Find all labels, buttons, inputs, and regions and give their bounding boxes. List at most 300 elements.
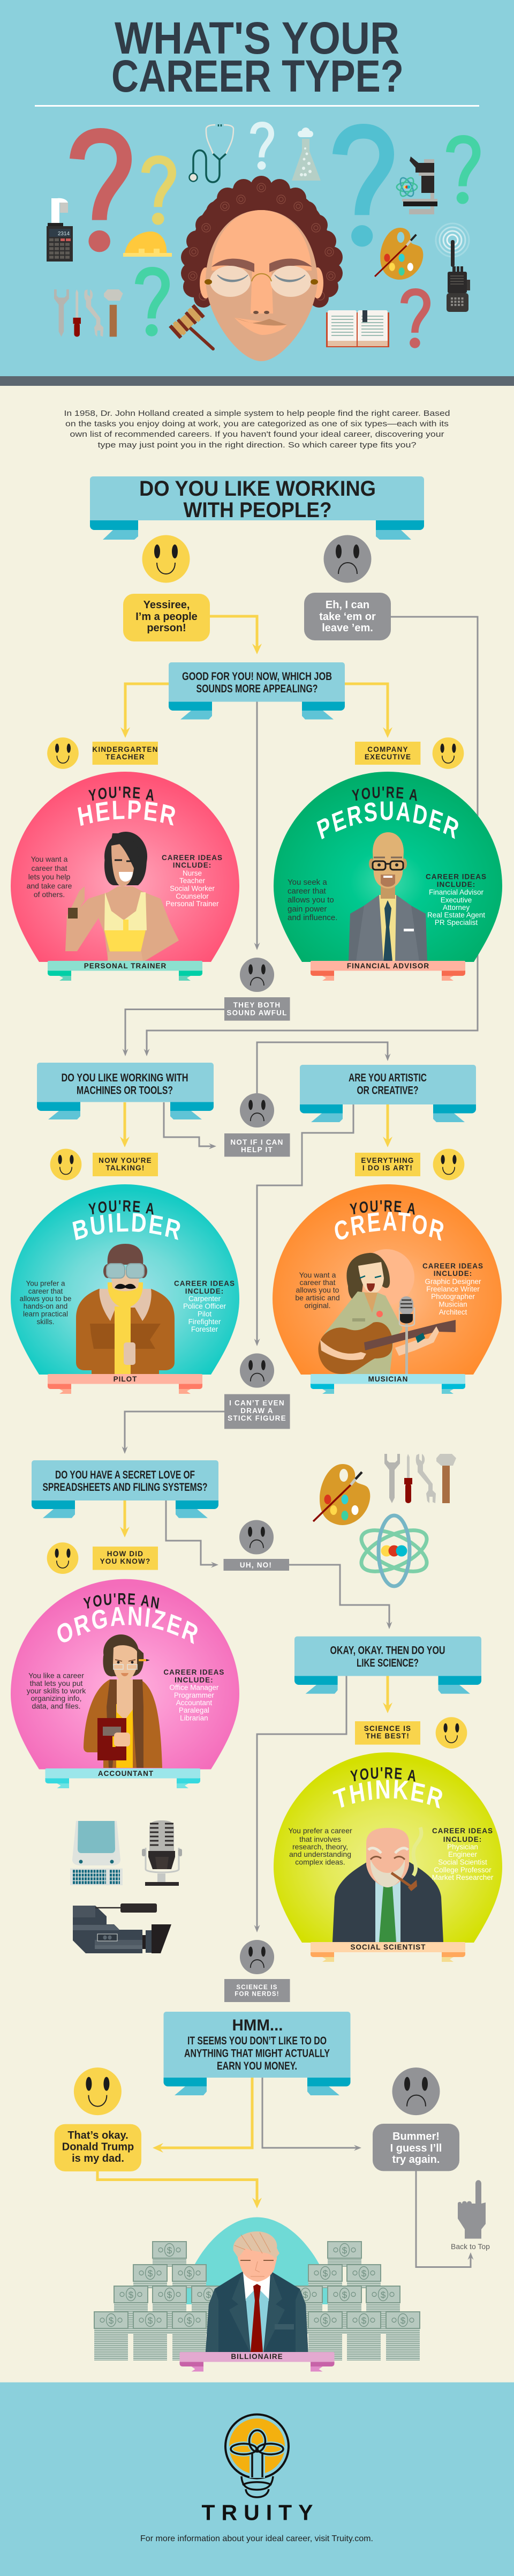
arrow: spreadsheets to organizer xyxy=(120,1500,130,1537)
icon: big red question mark xyxy=(77,136,124,252)
text: helper description: You want a xyxy=(31,855,68,863)
text: organizer description: your skills to work xyxy=(27,1686,86,1695)
text: helper career ideas xyxy=(162,854,223,908)
icon: sad face xyxy=(323,535,372,583)
banner: hmm: HMM... xyxy=(232,2017,283,2034)
money stacks: $ xyxy=(187,2316,192,2326)
text: helper career ideas: Teacher xyxy=(179,877,206,885)
text: helper description: lets you help xyxy=(28,872,71,881)
text: thinker description: and understanding xyxy=(289,1850,351,1858)
text: footer note: For more information about your ideal career, visit Truity.com. xyxy=(140,2534,373,2543)
arrow: job question to company executive xyxy=(345,684,392,738)
icon: stethoscope xyxy=(190,124,233,182)
character: pilot xyxy=(76,1244,175,1375)
text: thinker career ideas: College Professor xyxy=(434,1866,492,1874)
label: everything I do is art: EVERYTHING xyxy=(361,1156,414,1164)
hair xyxy=(181,176,343,316)
banner: machines or tools: MACHINES OR TOOLS? xyxy=(77,1085,173,1096)
text: persuader description: allows you to xyxy=(288,895,334,905)
arrow: sad face to artistic question xyxy=(257,1042,391,1093)
text: creator description: career that xyxy=(300,1278,336,1287)
arrow: job question to kindergarten teacher xyxy=(120,684,169,738)
banner: artistic or creative xyxy=(300,1065,476,1122)
money stacks: $ xyxy=(187,2268,192,2279)
arrow: bummer back to top xyxy=(416,2171,473,2267)
text: persuader career ideas: CAREER IDEAS xyxy=(426,872,487,881)
bubble: bummer xyxy=(373,2124,459,2171)
banner: good for you: SOUNDS MORE APPEALING? xyxy=(196,683,318,695)
heading: you're a persuader: YOU'RE A xyxy=(351,787,417,801)
label: kindergarten teacher: TEACHER xyxy=(105,753,145,761)
text: helper description: of others. xyxy=(34,890,65,899)
text: organizer description xyxy=(27,1671,86,1711)
ribbon: pilot: PILOT xyxy=(114,1375,137,1383)
label: how did you know xyxy=(93,1547,158,1570)
panel: creator xyxy=(273,1184,502,1394)
icon: gavel xyxy=(169,304,213,349)
icon: sad face center 4 xyxy=(239,1520,274,1555)
banner: good for you xyxy=(169,662,345,719)
label: science is the best xyxy=(355,1721,420,1745)
bubble: eh I can take em: take ‘em or xyxy=(319,611,376,623)
label: now you're talking: NOW YOU'RE xyxy=(99,1156,152,1164)
text: helper career ideas: Personal Trainer xyxy=(165,900,219,908)
ribbon: billionaire: BILLIONAIRE xyxy=(231,2353,283,2361)
text: creator career ideas xyxy=(422,1262,483,1316)
banner: okay okay do you like science: LIKE SCIENCE? xyxy=(357,1657,419,1669)
money stacks: $ xyxy=(206,2290,211,2300)
banner: spreadsheets and filing systems: DO YOU HAVE A SECRET LOVE OF xyxy=(55,1469,195,1481)
text: creator career ideas: Graphic Designer xyxy=(425,1278,481,1286)
heading: you're a helper xyxy=(78,787,175,826)
character: financial advisor xyxy=(349,832,427,961)
icon: computer xyxy=(70,1821,123,1885)
text: thinker career ideas: CAREER IDEAS xyxy=(432,1827,493,1835)
label: everything I do is art xyxy=(355,1153,420,1176)
heading: you're a persuader xyxy=(317,787,458,839)
intro text: own list of recommended careers. If you haven't found your ideal career, discovering your xyxy=(70,430,444,439)
text: creator career ideas: Musician xyxy=(439,1300,467,1309)
intro text: In 1958, Dr. John Holland created a simple system to help people find the right career. Based xyxy=(64,409,450,418)
text: builder career ideas: Police Officer xyxy=(183,1302,226,1310)
text: persuader career ideas: Attorney xyxy=(443,904,470,912)
heading: you're a helper: YOU'RE A xyxy=(88,787,154,801)
icon: walkie talkie xyxy=(436,223,470,312)
banner: okay okay do you like science: OKAY, OKAY. THEN DO YOU xyxy=(330,1644,445,1656)
banner: good for you: GOOD FOR YOU! NOW, WHICH JOB xyxy=(182,670,332,683)
text: builder description: learn practical xyxy=(23,1310,68,1318)
label: how did you know: YOU KNOW? xyxy=(100,1557,150,1565)
bubble: that's okay donald trump: That’s okay. xyxy=(67,2130,128,2141)
text: thinker description: complex ideas. xyxy=(295,1858,345,1866)
banner: hmm: EARN YOU MONEY. xyxy=(217,2060,297,2072)
text: creator description: be artisic and xyxy=(295,1294,340,1302)
banner: hmm: ANYTHING THAT MIGHT ACTUALLY xyxy=(184,2047,330,2060)
text: organizer career ideas: Paralegal xyxy=(179,1706,209,1714)
money stacks: $ xyxy=(323,2316,328,2326)
icon: palette large xyxy=(313,1464,370,1525)
arrow: uh no to science xyxy=(289,1565,392,1629)
banner: artistic or creative: OR CREATIVE? xyxy=(357,1085,419,1096)
text: organizer description: that lets you put xyxy=(30,1679,83,1688)
arrow: stick figure to spreadsheets xyxy=(122,1412,224,1454)
icon: yellow question mark xyxy=(146,160,172,225)
ribbon: financial advisor xyxy=(311,961,465,981)
text: creator description: original. xyxy=(304,1301,331,1310)
arrow: artistic to stick figure sad face xyxy=(254,1104,353,1346)
label: everything I do is art: I DO IS ART! xyxy=(362,1164,413,1172)
money stacks: $ xyxy=(323,2268,328,2279)
text: organizer description: organizing info, xyxy=(31,1694,81,1703)
character: personal trainer xyxy=(65,832,179,961)
heading: you're a thinker: YOU'RE A xyxy=(350,1767,415,1782)
money stacks: $ xyxy=(148,2316,153,2326)
arrow: science to thinker xyxy=(383,1676,392,1713)
banner: do you like working with people xyxy=(90,476,424,540)
bubble: eh I can take em: Eh, I can xyxy=(326,599,369,611)
icon: happy face creator xyxy=(433,1149,464,1180)
icon: flask xyxy=(292,128,321,181)
text: builder description: allows you to be xyxy=(20,1295,71,1303)
label: not if I can help it: HELP IT xyxy=(241,1146,273,1154)
text: helper career ideas: INCLUDE: xyxy=(173,861,211,869)
text: persuader description: You seek a xyxy=(288,878,327,887)
bubble: that's okay donald trump: is my dad. xyxy=(72,2153,124,2164)
text: thinker career ideas: INCLUDE: xyxy=(443,1835,482,1843)
label: company executive xyxy=(355,742,420,765)
icon: green question mark left xyxy=(139,271,165,337)
text: thinker career ideas: Social Scientist xyxy=(438,1858,487,1866)
text: builder description: You prefer a xyxy=(26,1280,65,1287)
text: thinker career ideas xyxy=(432,1827,494,1881)
text: thinker career ideas: Engineer xyxy=(448,1850,478,1858)
text: organizer career ideas: Office Manager xyxy=(169,1684,219,1692)
text: creator career ideas: Photographer xyxy=(431,1293,475,1301)
arrow: science to sad face xyxy=(254,1676,346,1932)
money stacks: $ xyxy=(400,2316,406,2326)
text: organizer description: data, and files. xyxy=(32,1702,81,1711)
label: science is for nerds: FOR NERDS! xyxy=(235,1991,279,1998)
icon: tools xyxy=(54,289,123,337)
heading: you're a builder: YOU'RE A xyxy=(88,1200,154,1215)
icon: sad face center 3 xyxy=(240,1354,274,1388)
text: organizer career ideas: INCLUDE: xyxy=(175,1676,214,1684)
text: organizer career ideas: CAREER IDEAS xyxy=(163,1668,224,1676)
panel: footer xyxy=(0,2383,514,2576)
text: creator description: You want a xyxy=(299,1271,336,1279)
banner: do you like working with people: DO YOU LIKE WORKING xyxy=(139,477,376,501)
character: billionaire xyxy=(206,2231,308,2352)
banner: spreadsheets and filing systems xyxy=(32,1460,218,1518)
text: back to top: Back to Top xyxy=(451,2242,490,2251)
label: company executive: COMPANY xyxy=(367,745,409,753)
label: they both sound awful: SOUND AWFUL xyxy=(226,1009,288,1017)
text: persuader career ideas: Financial Advisor xyxy=(429,888,484,896)
money stacks: $ xyxy=(361,2316,367,2326)
intro text: on the tasks you enjoy doing at work, you are categorized as one of six types—each with its xyxy=(65,420,449,429)
icon: happy face organizer xyxy=(47,1542,78,1574)
ribbon: social scientist xyxy=(311,1942,465,1962)
icon: happy face thinker xyxy=(436,1717,467,1749)
banner: hmm: IT SEEMS YOU DON’T LIKE TO DO xyxy=(187,2035,327,2047)
text: persuader career ideas: PR Specialist xyxy=(435,919,478,927)
heading: you're a builder xyxy=(72,1200,180,1240)
text: builder career ideas: CAREER IDEAS xyxy=(174,1280,235,1287)
text: builder description: skills. xyxy=(36,1318,55,1326)
title: WHAT'S YOUR xyxy=(115,13,399,63)
text: organizer career ideas: Accountant xyxy=(176,1699,212,1707)
text: creator career ideas: Architect xyxy=(439,1308,467,1316)
icon: green question mark right xyxy=(450,139,477,204)
ribbon: billionaire xyxy=(180,2352,334,2372)
money stacks: $ xyxy=(109,2316,114,2326)
text: creator career ideas: INCLUDE: xyxy=(434,1270,472,1278)
label: uh no: UH, NO! xyxy=(240,1561,272,1569)
label: company executive: EXECUTIVE xyxy=(365,753,411,761)
arrow: machines to builder xyxy=(120,1102,130,1147)
ribbon: pilot xyxy=(48,1374,202,1394)
text: persuader description: and influence. xyxy=(288,913,337,922)
icon: palette xyxy=(375,228,423,280)
ribbon: social scientist: SOCIAL SCIENTIST xyxy=(350,1943,426,1951)
icon: microphone xyxy=(142,1820,182,1886)
bubble: yessiree: Yessiree, xyxy=(143,599,190,611)
bubble: yessiree: person! xyxy=(147,622,186,634)
arrow: spreadsheets to uh no xyxy=(166,1500,218,1568)
text: helper career ideas: Social Worker xyxy=(170,884,215,893)
money stacks: $ xyxy=(303,2290,308,2300)
panel: billionaire xyxy=(94,2217,420,2372)
icon: atom large xyxy=(356,1515,433,1586)
text: creator description xyxy=(295,1271,340,1310)
icon: happy face large xyxy=(74,2067,122,2115)
text: helper career ideas: Nurse xyxy=(183,869,202,877)
label: kindergarten teacher xyxy=(92,742,158,765)
ribbon: personal trainer xyxy=(48,961,202,981)
icon: sad face center 1 xyxy=(240,958,274,992)
icon: calculator xyxy=(47,198,73,262)
banner: machines or tools xyxy=(37,1063,214,1119)
text: organizer description: You like a career xyxy=(28,1671,84,1680)
text: builder career ideas: Firefighter xyxy=(188,1318,221,1326)
text: builder career ideas: Carpenter xyxy=(188,1295,221,1303)
heading: you're a builder: BUILDER xyxy=(72,1213,180,1240)
text: thinker description xyxy=(288,1826,352,1866)
panel: persuader xyxy=(274,772,502,981)
icon: small red question mark xyxy=(404,292,427,348)
heading: you're an organizer: ORGANIZER xyxy=(57,1607,198,1644)
icon: big teal question mark xyxy=(340,131,387,247)
text: persuader description: career that xyxy=(288,886,327,896)
arrow: people person to job question xyxy=(210,616,262,654)
icon: sad face center 5 xyxy=(240,1940,274,1974)
arrow: eh to machines question xyxy=(143,617,478,1056)
bubble: eh I can take em xyxy=(304,593,391,640)
icon: happy face left xyxy=(47,737,79,769)
icon: happy face xyxy=(142,535,190,583)
text: thinker description: that involves xyxy=(299,1835,341,1843)
text: helper description: and take care xyxy=(27,882,72,890)
banner: okay okay do you like science xyxy=(294,1637,481,1694)
intro text xyxy=(64,409,450,450)
text: persuader career ideas xyxy=(426,872,487,927)
money stacks: $ xyxy=(167,2290,172,2300)
icon: head with glasses xyxy=(181,176,343,361)
money stacks: $ xyxy=(342,2290,347,2300)
ribbon: accountant: ACCOUNTANT xyxy=(98,1769,154,1778)
arrow: job question to sad face xyxy=(254,701,260,950)
label: not if I can help it: NOT IF I CAN xyxy=(230,1138,284,1146)
heading: you're a thinker xyxy=(332,1767,442,1809)
icon: happy face right xyxy=(433,737,464,769)
text: organizer career ideas: Librarian xyxy=(180,1714,208,1722)
ribbon: personal trainer: PERSONAL TRAINER xyxy=(84,962,167,970)
text: organizer career ideas xyxy=(163,1668,224,1722)
panel: thinker xyxy=(274,1752,502,1962)
heading: you're a creator: YOU'RE A xyxy=(349,1200,415,1215)
text: persuader career ideas: INCLUDE: xyxy=(437,880,475,888)
text: builder description: career that xyxy=(28,1287,63,1295)
logo: truity wordmark: TRUITY xyxy=(201,2500,313,2525)
panel: helper xyxy=(11,772,239,981)
money stacks: $ xyxy=(167,2245,172,2256)
panel: organizer xyxy=(11,1579,239,1788)
character: accountant xyxy=(84,1634,162,1768)
arrow: hmm to bummer xyxy=(262,2078,361,2151)
money stacks xyxy=(94,2242,420,2361)
label: now you're talking xyxy=(93,1153,158,1176)
arrow: trump to billionaire xyxy=(97,2171,262,2208)
text: helper description: career that xyxy=(32,864,67,872)
logo: truity light bulb xyxy=(225,2415,289,2497)
title xyxy=(111,13,404,101)
icon: pointing hand xyxy=(458,2180,486,2239)
text: helper career ideas: Counselor xyxy=(176,892,209,900)
icon: happy face builder xyxy=(50,1149,81,1180)
arrow: artistic to creator xyxy=(383,1104,392,1147)
text: builder career ideas: Pilot xyxy=(198,1310,211,1318)
text: helper description xyxy=(27,855,72,899)
intro text: type may just point you in the right direction. So which career type fits you? xyxy=(97,441,417,450)
bubble: yessiree: I’m a people xyxy=(135,611,198,623)
text: builder description: hands-on and xyxy=(24,1302,67,1310)
banner: spreadsheets and filing systems: SPREADSHEETS AND FILING SYSTEMS? xyxy=(43,1481,208,1494)
icon: open book xyxy=(326,310,389,347)
text: persuader description xyxy=(288,878,337,922)
bubble: bummer: Bummer! xyxy=(392,2131,440,2142)
arrow: machines to not if I can help it xyxy=(164,1102,216,1149)
label: I can't even draw a stick figure xyxy=(224,1394,290,1429)
bubble: that's okay donald trump: Donald Trump xyxy=(62,2141,134,2153)
banner: machines or tools: DO YOU LIKE WORKING WITH xyxy=(61,1072,188,1084)
icon: sad face center 2 xyxy=(240,1093,274,1128)
bubble: bummer: I guess I’ll xyxy=(390,2142,442,2154)
panel: builder xyxy=(11,1184,239,1394)
heading: you're a creator xyxy=(335,1200,443,1241)
character: social scientist xyxy=(332,1827,443,1942)
banner: do you like working with people: WITH PEOPLE? xyxy=(183,498,332,522)
text: thinker description: research, theory, xyxy=(292,1842,348,1851)
label: I can't even draw a stick figure: DRAW A xyxy=(240,1407,274,1415)
text: helper career ideas: CAREER IDEAS xyxy=(162,854,223,862)
label: kindergarten teacher: KINDERGARTEN xyxy=(92,745,158,753)
bubble: that's okay donald trump xyxy=(55,2124,141,2171)
heading: you're a helper: HELPER xyxy=(78,800,175,826)
panel: header xyxy=(0,0,514,386)
bubble: yessiree xyxy=(123,594,210,641)
text: builder career ideas xyxy=(174,1280,235,1333)
text: creator description: allows you to xyxy=(296,1286,339,1294)
ribbon: musician xyxy=(311,1374,465,1394)
icon: small atom xyxy=(397,176,417,198)
text: persuader career ideas: Executive xyxy=(441,896,472,904)
text: organizer career ideas: Programmer xyxy=(174,1691,214,1699)
icon: microscope xyxy=(402,156,437,214)
banner: artistic or creative: ARE YOU ARTISTIC xyxy=(349,1072,427,1084)
heading: you're a persuader: PERSUADER xyxy=(317,802,458,839)
bubble: eh I can take em: leave ’em. xyxy=(322,622,373,634)
icon: pale question mark xyxy=(253,124,271,170)
text: creator career ideas: Freelance Writer xyxy=(426,1285,480,1293)
connectors: flowchart arrows xyxy=(97,616,478,2267)
text: thinker career ideas: Physician xyxy=(447,1843,478,1851)
label: they both sound awful: THEY BOTH xyxy=(233,1001,281,1009)
icon: calculator: 2314 xyxy=(58,231,70,237)
icon: video camera xyxy=(73,1903,171,1953)
arrow: both awful to machines question xyxy=(122,1010,224,1056)
label: science is the best: SCIENCE IS xyxy=(364,1724,411,1733)
money stacks: $ xyxy=(342,2245,347,2256)
label: I can't even draw a stick figure: STICK FIGURE xyxy=(228,1414,286,1422)
heading: you're a thinker: THINKER xyxy=(332,1780,442,1809)
label: they both sound awful xyxy=(224,997,290,1021)
text: builder description xyxy=(20,1280,71,1326)
label: science is for nerds xyxy=(224,1979,290,2002)
text: builder career ideas: INCLUDE: xyxy=(185,1287,224,1295)
text: persuader career ideas: Real Estate Agent xyxy=(427,911,485,919)
money stacks: $ xyxy=(361,2268,367,2279)
ribbon: accountant xyxy=(45,1768,200,1788)
label: uh no xyxy=(224,1559,289,1571)
heading: you're an organizer: YOU'RE AN xyxy=(83,1593,160,1609)
money stacks: $ xyxy=(148,2268,153,2279)
character: musician xyxy=(319,1249,456,1375)
banner: hmm xyxy=(163,2012,351,2095)
label: how did you know: HOW DID xyxy=(107,1550,143,1558)
money stacks: $ xyxy=(381,2290,386,2300)
ribbon: musician: MUSICIAN xyxy=(368,1375,408,1383)
icon: sad face large xyxy=(392,2067,440,2115)
text: builder career ideas: Forester xyxy=(191,1325,218,1333)
arrow: hmm to donald trump xyxy=(153,2078,252,2153)
icon: tools large xyxy=(384,1454,456,1503)
label: science is the best: THE BEST! xyxy=(366,1732,410,1740)
label: I can't even draw a stick figure: I CAN’T EVEN xyxy=(229,1399,285,1407)
text: persuader description: gain power xyxy=(288,905,327,914)
label: not if I can help it xyxy=(224,1133,290,1156)
label: now you're talking: TALKING! xyxy=(105,1164,145,1172)
label: science is for nerds: SCIENCE IS xyxy=(236,1984,278,1991)
text: thinker description: You prefer a career xyxy=(288,1826,352,1835)
title: CAREER TYPE? xyxy=(111,51,404,101)
ribbon: financial advisor: FINANCIAL ADVISOR xyxy=(347,962,429,970)
icon: hard hat xyxy=(123,232,172,257)
text: creator career ideas: CAREER IDEAS xyxy=(422,1262,483,1270)
heading: you're a creator: CREATOR xyxy=(335,1212,443,1241)
money stacks: $ xyxy=(128,2290,134,2300)
text: thinker career ideas: Market Researcher xyxy=(432,1873,494,1881)
bubble: bummer: try again. xyxy=(392,2154,440,2166)
